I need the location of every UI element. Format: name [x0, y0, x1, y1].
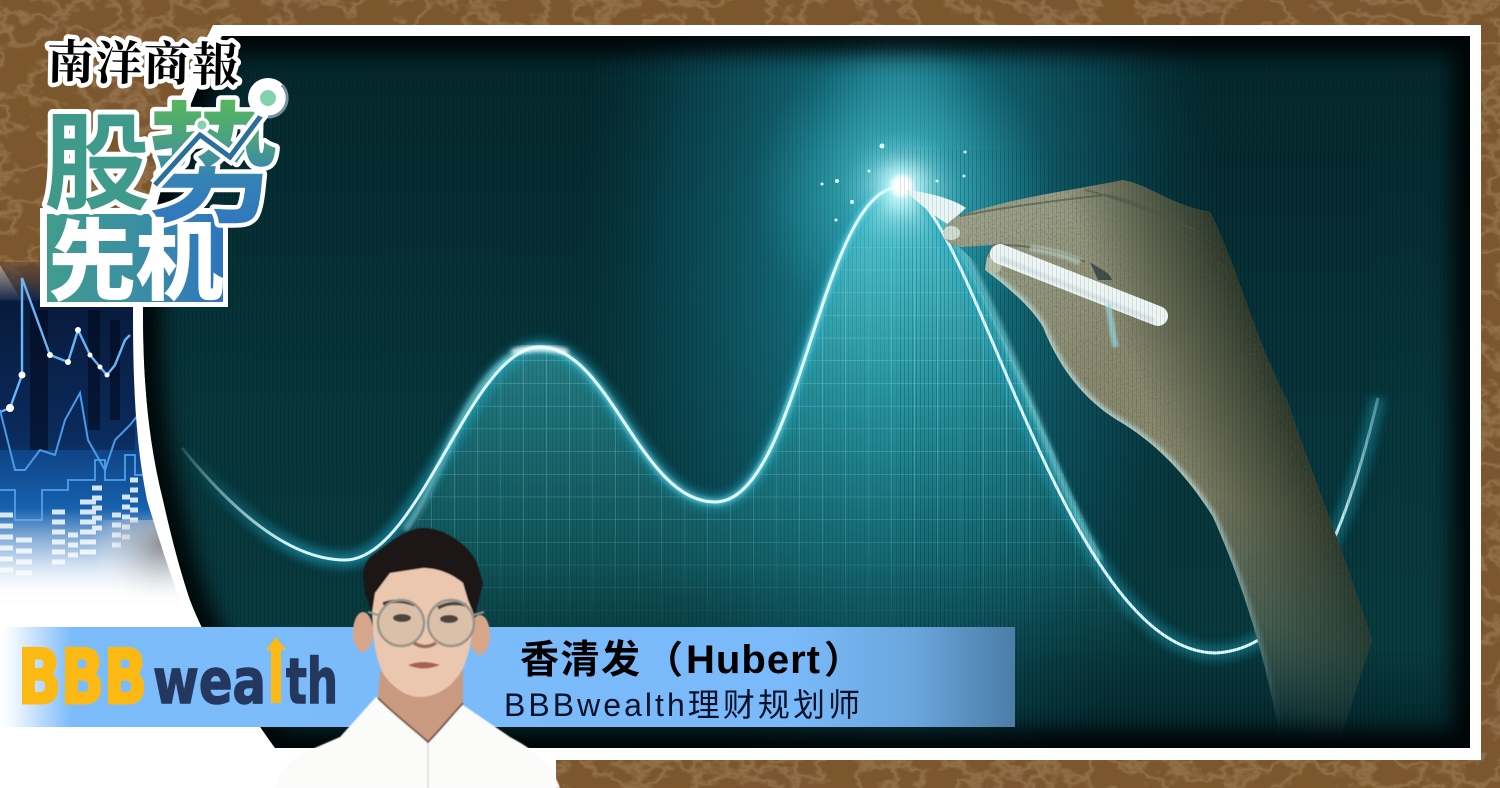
- band: light blue name strip: [0, 627, 1015, 727]
- name text block: ）: [824, 640, 862, 682]
- logo: BBBwealth: [18, 633, 338, 721]
- ears: [353, 612, 373, 652]
- name text block: [504, 638, 862, 723]
- hand shape: [943, 180, 1372, 726]
- curve: [182, 187, 1378, 653]
- peak sparkle: [820, 144, 966, 222]
- vignette: [143, 36, 1470, 748]
- name text block: 香清发: [520, 639, 640, 682]
- name text block: Hubert: [686, 638, 820, 682]
- title block: 势: [147, 93, 279, 240]
- stylus tip: [905, 190, 966, 224]
- grid under the curve: [412, 206, 1130, 633]
- eyebrows: [383, 601, 466, 608]
- newspaper name: 南洋商報: [46, 25, 240, 96]
- icon: arrow letter l: [266, 637, 286, 703]
- icon: hand holding stylus: [900, 150, 1390, 750]
- stylus body: [1000, 254, 1158, 316]
- masthead logo: [40, 25, 288, 311]
- icon: rising arrow: [155, 78, 288, 185]
- logo: BBBwealth: th: [286, 645, 338, 718]
- eyes: [393, 614, 411, 622]
- nose: [414, 643, 436, 646]
- title block: [40, 78, 288, 311]
- neck: [378, 670, 463, 742]
- logo: BBBwealth: BBB: [18, 633, 147, 721]
- hair: [363, 528, 483, 617]
- face: [372, 565, 474, 697]
- chart lines: [0, 278, 130, 412]
- shirt: [275, 697, 560, 788]
- glasses: [378, 600, 474, 646]
- finger creases: [960, 190, 1195, 262]
- bar columns: [0, 480, 138, 573]
- name text block: BBBwealth理财规划师: [504, 687, 860, 723]
- mouth: [408, 662, 440, 668]
- logo: BBBwealth: wea: [153, 645, 266, 718]
- name text block: （: [645, 640, 683, 682]
- lit edge: [985, 270, 1280, 740]
- title block: 先机: [49, 214, 223, 311]
- portrait: man with glasses: [275, 528, 560, 788]
- panel: chart photo at left edge: [0, 262, 180, 602]
- title block: 股: [44, 106, 150, 224]
